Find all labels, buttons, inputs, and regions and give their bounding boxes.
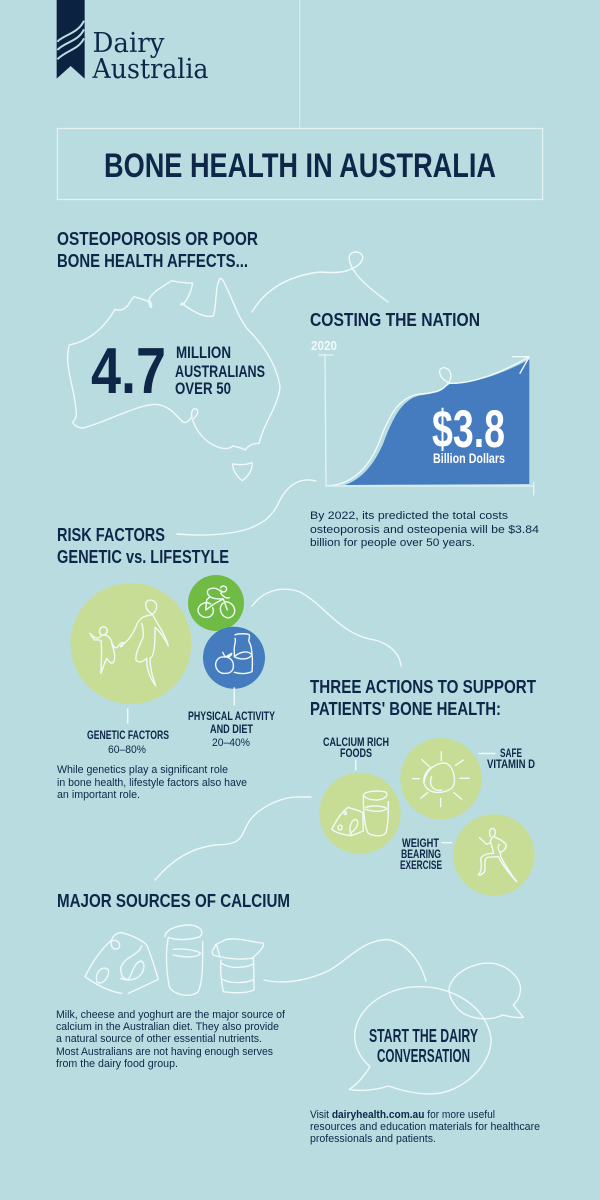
text: calcium paragraph: from the dairy food group. [56,1058,178,1070]
callout: start the dairy conversation: START THE DAIRY [369,1026,478,1046]
heading: osteoporosis: OSTEOPOROSIS OR POOR [57,228,258,249]
connector: risk to actions [252,589,401,666]
logo wordmark [92,28,208,85]
label: physical activity and diet: 20–40% [212,737,250,749]
text: genetics paragraph: an important role. [57,789,140,801]
icon: diet circle [203,627,265,689]
text: genetics paragraph [57,764,247,801]
text: costing paragraph: By 2022, its predicted the total costs [310,510,509,522]
text: visit paragraph: professionals and patients. [310,1133,436,1145]
text: calcium paragraph: Most Australians are not having enough serves [56,1046,273,1058]
label: weight bearing exercise: EXERCISE [400,860,442,872]
connector: costing to risk [177,480,316,535]
label: genetic factors: GENETIC FACTORS [87,730,169,742]
text: visit paragraph: resources and education materials for healthcare [310,1121,540,1133]
icon: exercise circle [453,814,535,896]
text: genetics paragraph: While genetics play a significant role [57,764,228,776]
icon: cycling circle [188,575,244,631]
connector: calcium to conversation [264,940,426,982]
heading: major sources of calcium: MAJOR SOURCES OF CALCIUM [57,890,290,911]
heading: risk factors: RISK FACTORS [57,524,165,545]
text: genetics paragraph: in bone health, lifestyle factors also have [57,777,247,789]
stat: 4.7 million: 4.7 [91,334,166,407]
label: calcium rich foods [323,737,389,760]
text: calcium paragraph [56,1009,286,1070]
label: weight bearing exercise: WEIGHT [402,838,439,850]
icon: speech bubbles [349,963,523,1094]
heading: osteoporosis [57,228,258,271]
text: costing paragraph: billion for people over 50 years. [310,537,475,549]
text: costing paragraph [310,510,539,549]
icon: milk glass [165,925,203,995]
title: BONE HEALTH IN AUSTRALIA [104,147,496,185]
callout: start the dairy conversation: CONVERSATION [377,1046,470,1066]
icon: calcium rich foods circle [319,773,401,854]
text: visit paragraph [310,1109,540,1145]
title box [58,128,542,200]
icon: genetic factors circle [70,583,192,704]
logo wordmark: Australia [92,54,208,85]
icon: sun circle [400,738,482,819]
stat: 4.7 million: MILLION [176,343,231,362]
chart value: $3.8 [432,400,505,459]
label: physical activity and diet [188,711,275,749]
label: physical activity and diet: AND DIET [210,724,253,736]
text: calcium paragraph: Milk, cheese and yoghurt are the major source of [56,1009,286,1021]
label: weight bearing exercise [400,838,442,872]
label: weight bearing exercise: BEARING [401,849,441,861]
heading: three actions: PATIENTS' BONE HEALTH: [310,698,501,719]
heading: risk factors [57,524,229,567]
chart year label: 2020 [311,339,337,353]
text: calcium paragraph: calcium in the Australian diet. They also provide [56,1021,279,1033]
chart value unit: Billion Dollars [433,450,505,466]
logo wordmark: Dairy [92,28,165,59]
stat: 4.7 million [91,334,265,407]
icons: cheese, milk, yoghurt [85,925,264,995]
stat: 4.7 million: OVER 50 [175,379,231,398]
heading: costing the nation: COSTING THE NATION [310,309,480,330]
label: calcium rich foods: CALCIUM RICH [323,737,389,749]
icon: cheese [85,933,158,993]
text: visit paragraph: Visit dairyhealth.com.au for more useful [310,1109,495,1121]
text: costing paragraph: osteoporosis and osteopenia will be $3.84 [310,524,539,536]
connector: map to costing [252,252,388,312]
heading: three actions [310,676,537,719]
heading: three actions: THREE ACTIONS TO SUPPORT [310,676,537,697]
heading: osteoporosis: BONE HEALTH AFFECTS... [57,250,248,271]
icon: ribbon [57,0,85,79]
map: Australia outline [68,278,280,481]
label: genetic factors: 60–80% [108,744,146,756]
label: genetic factors [87,730,169,756]
label: calcium rich foods: FOODS [340,748,372,760]
label: safe vitamin D: SAFE [500,748,522,760]
label: safe vitamin D [487,748,535,771]
callout: start the dairy conversation [369,1026,478,1066]
icon: yoghurt [212,939,264,993]
logo: Dairy Australia [57,0,209,85]
heading: risk factors: GENETIC vs. LIFESTYLE [57,546,229,567]
text: calcium paragraph: a natural source of other essential nutrients. [56,1033,262,1045]
label: physical activity and diet: PHYSICAL ACTIVITY [188,711,275,723]
stat: 4.7 million: AUSTRALIANS [175,362,265,381]
chart: cost curve [311,339,534,495]
connector: actions to calcium [155,797,300,880]
label: safe vitamin D: VITAMIN D [487,759,535,771]
